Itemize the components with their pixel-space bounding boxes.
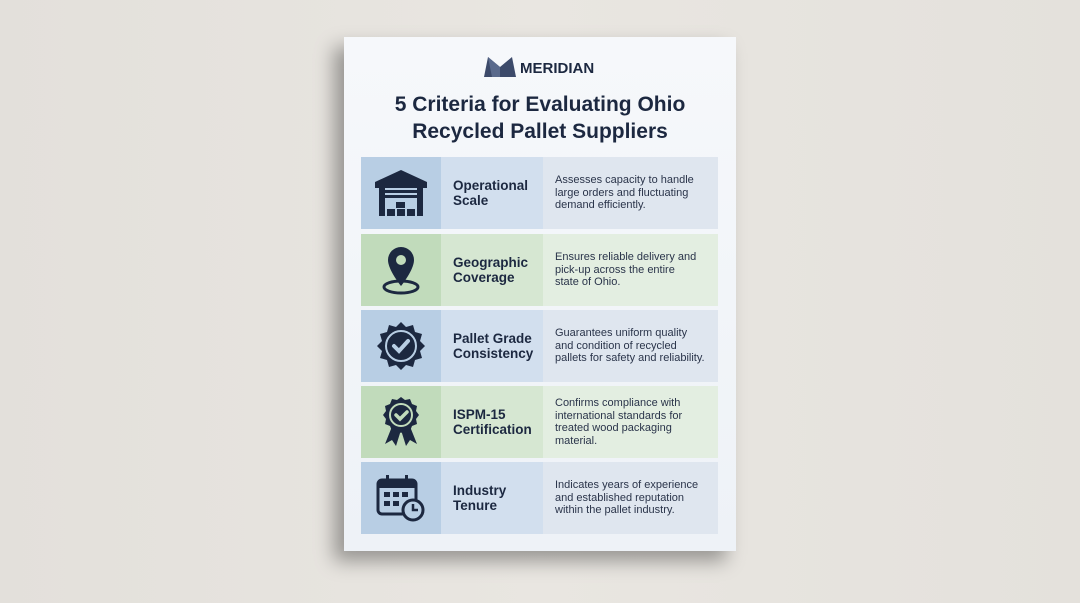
title: 5 Criteria for Evaluating Ohio	[395, 93, 685, 116]
logo: MERIDIAN	[520, 60, 594, 77]
row: industry tenure: within the pallet industry.	[555, 504, 675, 516]
row: operational scale: large orders and fluctuating	[555, 187, 688, 199]
card	[344, 37, 736, 551]
icon: badge check	[361, 310, 441, 382]
row: ispm-15: Certification	[453, 422, 532, 437]
row: pallet grade consistency: and condition of recycled	[555, 340, 677, 352]
row: pallet grade consistency: Guarantees uniform quality	[555, 327, 687, 339]
title	[395, 93, 685, 143]
row: pallet grade consistency: Consistency	[453, 346, 533, 361]
row: industry tenure: Industry	[453, 483, 506, 498]
row: ispm-15: treated wood packaging	[555, 422, 672, 434]
icon: location pin	[361, 234, 441, 306]
row: geographic coverage	[361, 234, 718, 306]
row: industry tenure	[361, 462, 718, 534]
icon: ribbon	[361, 386, 441, 458]
row: geographic coverage: state of Ohio.	[555, 276, 620, 288]
row: industry tenure: Tenure	[453, 498, 497, 513]
row: geographic coverage: Coverage	[453, 270, 515, 285]
row: ispm-15: Confirms compliance with	[555, 397, 680, 409]
row: pallet grade consistency: Pallet Grade	[453, 331, 532, 346]
row: operational scale: demand efficiently.	[555, 199, 646, 211]
row: pallet grade consistency	[361, 310, 718, 382]
row: geographic coverage: pick-up across the entire	[555, 264, 675, 276]
row: operational scale: Operational	[453, 178, 528, 193]
row: industry tenure: Indicates years of experience	[555, 479, 698, 491]
row: operational scale: Assesses capacity to handle	[555, 174, 694, 186]
icon: warehouse	[361, 157, 441, 229]
logo	[484, 57, 594, 77]
row: industry tenure: and established reputation	[555, 492, 684, 504]
row: ispm-15: ISPM-15	[453, 407, 506, 422]
row: ispm-15	[361, 386, 718, 458]
row: pallet grade consistency: pallets for safety and reliability.	[555, 352, 705, 364]
row: geographic coverage: Geographic	[453, 255, 528, 270]
row: geographic coverage: Ensures reliable delivery and	[555, 251, 696, 263]
icon: calendar clock	[361, 462, 441, 534]
title: Recycled Pallet Suppliers	[412, 120, 668, 143]
row: operational scale: Scale	[453, 193, 488, 208]
row: ispm-15: material.	[555, 434, 597, 446]
row: operational scale	[361, 157, 718, 229]
row: ispm-15: international standards for	[555, 410, 682, 422]
